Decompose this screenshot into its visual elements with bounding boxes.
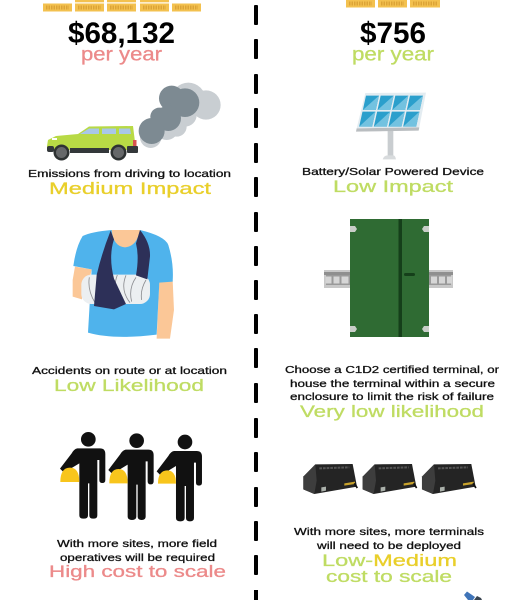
worker one [60,432,105,519]
icon: three terminals [303,464,476,494]
left cost figure: $68,132 [68,17,175,50]
low likelihood rating: Low Likelihood [54,376,204,395]
icon: gold bars right [346,0,440,8]
field operatives text: operatives will be required [60,552,215,564]
cost to scale rating: cost to scale [326,567,452,586]
icon: solar panel [356,93,426,159]
low impact rating: Low Impact [333,177,453,196]
terminal one [303,464,357,494]
terminals text: will need to be deployed [316,540,461,552]
accidents text: Accidents on route or at location [32,365,227,377]
icon: gold bars left [43,0,201,12]
enclosure recommendation text: enclosure to limit the risk of failure [290,391,494,403]
very low likelihood rating: Very low likelihood [300,402,484,421]
field operatives text [57,538,217,564]
worker three [157,435,202,521]
medium impact rating: Medium Impact [49,179,211,198]
icon: green enclosure on din rail [324,219,453,337]
icon: three field operatives with hard hats [60,432,202,521]
icon: smoke cloud [139,83,221,148]
terminals text [294,526,484,552]
left per year label: per year [81,44,163,66]
high cost rating: High cost to scale [49,562,226,581]
icon: satellite [464,592,482,600]
right cost figure: $756 [360,17,426,50]
emissions text: Emissions from driving to location [28,168,231,180]
terminal two [363,464,417,494]
center dashed divider [254,5,258,600]
worker two [108,433,154,520]
terminal three [422,464,476,494]
low-medium rating: Low- Medium [322,551,457,570]
right per year label: per year [352,44,435,66]
enclosure recommendation text [285,364,500,403]
icon: injured person with sling [73,230,174,339]
field operatives text: With more sites, more field [57,538,217,550]
enclosure recommendation text: house the terminal within a secure [290,378,495,390]
terminals text: With more sites, more terminals [294,526,484,538]
icon: green car [47,126,138,160]
enclosure recommendation text: Choose a C1D2 certified terminal, or [285,364,500,376]
battery solar text: Battery/Solar Powered Device [302,166,484,178]
